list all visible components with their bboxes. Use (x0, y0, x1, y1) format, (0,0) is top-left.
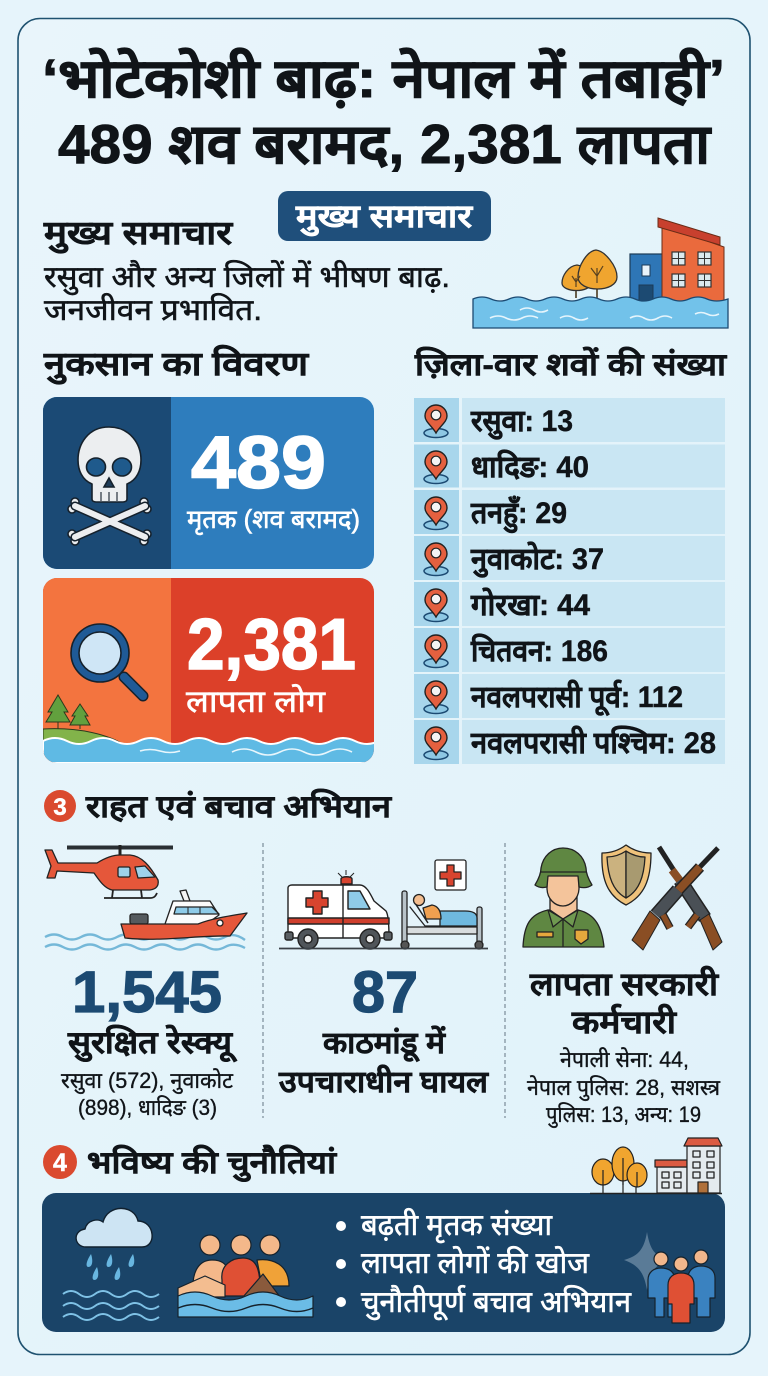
water band (43, 738, 379, 763)
stat: injured: 87 (352, 960, 418, 1025)
main news text block (43, 214, 450, 327)
icon: ambulance (285, 870, 392, 949)
stat: rescued: 1,545 (72, 960, 222, 1025)
row: Chitwan: चितवन: 186 (470, 633, 608, 668)
icon: crossed rifles (632, 847, 722, 950)
heading: damage details: नुकसान का विवरण (43, 344, 309, 385)
row: Tanahun (414, 490, 725, 534)
stat: rescued: (898), धादिङ (3) (78, 1095, 217, 1120)
icon: magnifying glass (71, 624, 143, 696)
icon: rescue boat (121, 890, 247, 939)
heading: future challenges (43, 1144, 337, 1182)
card: deaths: 489 (191, 421, 326, 504)
row: Nuwakot: नुवाकोट: 37 (470, 541, 604, 578)
stat: injured: उपचाराधीन घायल (278, 1064, 490, 1099)
text: missing government staff: नेपाली सेना: 44, (560, 1047, 689, 1072)
icon: people in flood (178, 1235, 313, 1317)
row: Nawalparasi West: नवलपरासी पश्चिम: 28 (470, 725, 716, 760)
row: Gorkha (414, 582, 725, 626)
icon: soldier (523, 848, 604, 947)
icon: hill and trees (43, 695, 126, 746)
text: missing government staff: लापता सरकारी (529, 965, 720, 1002)
row: Nuwakot (414, 536, 725, 580)
icon: shield (602, 845, 651, 905)
list: challenges: बढ़ती मृतक संख्या (361, 1208, 553, 1244)
list: challenges (336, 1208, 632, 1321)
row: Nawalparasi East: नवलपरासी पूर्व: 112 (470, 679, 683, 716)
row: Rasuwa (414, 398, 725, 442)
icon: group of people (648, 1250, 715, 1323)
icon: skull and crossbones (68, 427, 151, 545)
main news text block: जनजीवन प्रभावित. (44, 293, 262, 327)
icon: rain cloud and waves (63, 1208, 159, 1320)
icon: town skyline (590, 1138, 722, 1194)
heading: district-wise bodies: ज़िला-वार शवों की संख्या (414, 346, 727, 382)
card: missing (43, 578, 379, 763)
stat: injured (278, 960, 490, 1099)
panel: district list (414, 398, 725, 764)
stat: rescued (61, 960, 237, 1120)
text: missing government staff (527, 965, 721, 1128)
card: deaths (43, 397, 374, 569)
heading: relief and rescue: राहत एवं बचाव अभियान (85, 788, 393, 824)
row: Chitwan (414, 628, 725, 672)
row: Tanahun: तनहुँ: 29 (470, 495, 567, 534)
title: 489 शव बरामद, 2,381 लापता (58, 113, 712, 175)
icon: sparkle (624, 1232, 668, 1290)
text: missing government staff: नेपाल पुलिस: 28, सशस्त्र (527, 1075, 721, 1101)
card: missing: लापता लोग (186, 684, 326, 719)
row: Nawalparasi West (414, 720, 725, 764)
list: challenges: चुनौतीपूर्ण बचाव अभियान (361, 1285, 632, 1321)
title (42, 47, 725, 175)
row: Rasuwa: रसुवा: 13 (470, 405, 573, 440)
stat: injured: काठमांडू में (322, 1025, 446, 1062)
stat: rescued: रसुवा (572), नुवाकोट (61, 1068, 234, 1094)
list: challenges: लापता लोगों की खोज (361, 1246, 590, 1280)
main news text block: मुख्य समाचार (43, 214, 234, 254)
heading: relief and rescue: 3 (53, 794, 67, 821)
heading: future challenges: भविष्य की चुनौतियां (87, 1144, 337, 1182)
icon: flooded town (473, 218, 728, 328)
stat: rescued: सुरक्षित रेस्क्यू (67, 1024, 237, 1063)
row: Dhading (414, 444, 725, 488)
icon: helicopter (45, 845, 173, 898)
text: missing government staff: कर्मचारी (571, 1003, 678, 1040)
badge: main news (278, 191, 491, 241)
main news text block: रसुवा और अन्य जिलों में भीषण बाढ़. (44, 260, 450, 296)
row: Nawalparasi East (414, 674, 725, 718)
icon: waves under boat (45, 934, 245, 950)
title: ‘भोटेकोशी बाढ़: नेपाल में तबाही’ (42, 47, 725, 109)
badge: main news: मुख्य समाचार (295, 198, 474, 237)
icon: hospital bed and patient (401, 860, 483, 949)
row: Dhading: धादिङ: 40 (471, 449, 589, 484)
card: deaths: मृतक (शव बरामद) (187, 504, 360, 535)
text: missing government staff: पुलिस: 13, अन्य: 19 (546, 1102, 701, 1128)
panel: challenges (42, 1193, 725, 1332)
heading: future challenges: 4 (53, 1149, 67, 1177)
row: Gorkha: गोरखा: 44 (470, 587, 590, 622)
card: missing: 2,381 (187, 605, 356, 685)
